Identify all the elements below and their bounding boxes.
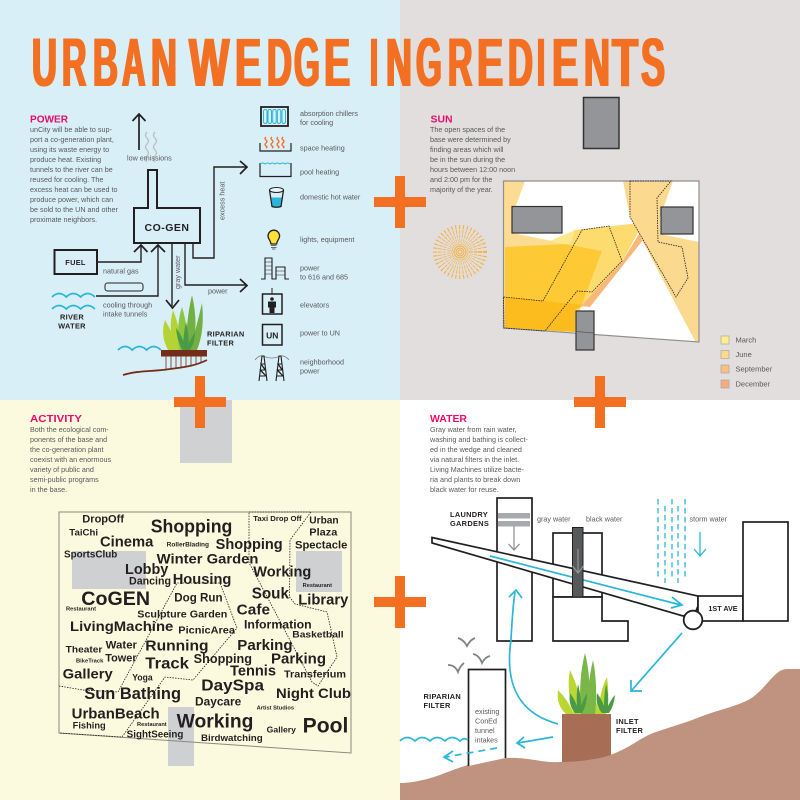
water text block [429,425,528,494]
icon: power buildings: to 616 and 685 [300,272,348,282]
plus sign: power and activity [174,376,226,428]
activity map: Shopping [194,652,252,666]
activity map: DaySpa [201,678,264,695]
activity map: SportsClub [64,549,117,560]
icon: light bulb: lights, equipment [300,235,354,244]
icon: absorption chillers: for cooling [300,118,333,127]
panel: sun [430,98,773,388]
activity map: Gallery [267,725,297,734]
title: E [477,24,504,101]
power text block: tunnels to the river can be [30,165,113,174]
water text block: via natural filters in the inlet. [430,455,519,464]
activity map: SightSeeing [127,729,183,740]
activity map: Birdwatching [201,733,263,744]
legend: September [736,364,773,374]
power text block: port a co-generation plant, [30,135,114,144]
birds [448,638,490,672]
inlet filter plant: INLET [616,717,639,726]
riparian filter plant: FILTER [207,338,234,348]
riparian tower: RIPARIAN [424,692,461,701]
power text block: be sold to the UN and other [30,205,119,214]
title: N [386,24,412,101]
activity map [59,512,351,766]
activity map: RollerBlading [167,541,209,548]
river water: WATER [58,322,86,330]
arrow: low emissions: low emissions [127,154,172,162]
title [32,24,665,101]
activity map: CoGEN [81,588,150,610]
activity map: Spectacle [295,540,347,552]
activity heading: ACTIVITY [30,414,82,425]
activity map: Working [253,565,311,581]
riparian tower: intakes [475,736,498,744]
river water: RIVER [60,312,84,322]
activity map: Tower [105,653,137,665]
activity map: Theater [66,645,103,656]
power text block: proximate neighbors. [30,215,97,224]
activity map: Gallery [63,666,113,682]
arrow: cooling through intake tunnels [96,245,165,318]
activity map: Library [298,592,349,609]
title: U [32,24,57,101]
arrow: inlet filter to tower [509,590,558,724]
plus sign: activity and water [374,576,426,628]
fuel box [54,250,97,274]
title: B [93,24,118,101]
water text block: Living Machines utilize bacte- [430,465,524,474]
icon: sun [438,230,482,274]
river waves [400,738,468,741]
sun text block [430,125,515,194]
activity map: Daycare [195,696,241,708]
activity map: Souk [252,585,289,602]
activity map: Restaurant [66,607,96,613]
gray water and black water labels [537,514,623,524]
activity map: TaiChi [69,527,98,538]
water text block: ed in the wedge and cleaned [430,445,522,454]
icon: power buildings [261,258,348,282]
plus sign: power and sun [374,176,426,228]
top building [584,98,619,148]
icon: elevator: elevators [300,300,330,310]
icon: absorption chillers [261,107,358,127]
water text block: Gray water from rain water, [430,425,517,434]
title: D [508,24,533,101]
riparian tower: FILTER [424,701,451,710]
riparian tower: ConEd [475,716,497,726]
laundry gardens tower: GARDENS [450,519,489,528]
laundry gardens tower: LAUNDRY [450,510,488,519]
arrow: junction to inlet filter [631,633,682,691]
activity map: Water [106,640,138,652]
arrow: gray water [166,243,182,308]
panel: power [30,107,361,381]
activity text block: in the base. [30,485,67,494]
activity map: Information [244,618,312,632]
legend: December [736,380,771,388]
icon: neighborhood power: neighborhood [300,358,344,366]
sun text block: majority of the year. [430,185,493,194]
power text block: using its waste energy to [30,145,109,154]
sun text block: The open spaces of the [430,125,505,134]
co-gen plant [134,170,200,243]
activity text block: semi-public programs [30,475,99,484]
black water building [553,533,628,641]
inlet filter plant [558,653,643,762]
legend: June [736,350,752,359]
hillside ground [400,669,800,800]
power text block [30,125,119,224]
storm water [658,499,728,583]
title: N [584,24,609,101]
activity map: LivingMachine [70,618,174,634]
sun text block: and 2:00 pm for the [430,175,492,184]
title: I [537,24,545,101]
icon: light bulb [268,230,354,249]
sun text block: base were determined by [430,135,511,144]
activity map: Urban [309,515,339,526]
arrow: power: power [208,286,228,296]
icon: domestic hot water: domestic hot water [300,192,361,202]
wedge section [432,538,698,616]
sun text block: be in the sun during the [430,155,505,164]
legend: March [736,336,756,344]
activity map: Working [177,711,253,732]
activity map: Fishing [73,720,106,730]
riparian filter plant: RIPARIAN [207,330,245,338]
icon: UN: power to UN [300,328,340,338]
arrow: cooling through intake tunnels: intake tunnels [103,310,148,318]
arrow: wedge water flow [490,556,682,608]
title: D [267,24,292,101]
plus sign: sun and water [574,376,626,428]
activity text block [30,425,112,494]
water text block: ria and plants to break down [430,475,520,484]
title: E [235,24,261,101]
first avenue and junction: 1ST AVE [708,604,738,613]
activity map: Dog Run [174,591,223,605]
activity map: Plaza [309,527,338,538]
activity map: Sculpture Garden [137,609,227,620]
activity map: Track [145,655,189,672]
title: I [370,24,378,101]
panel: water [400,414,800,800]
icon: neighborhood power: power [300,366,320,376]
power text block: excess heat can be used to [30,185,118,194]
black water pipe [572,528,584,597]
activity map: Cafe [237,602,270,619]
activity map: UrbanBeach [72,706,160,722]
co-gen plant: CO-GEN [144,222,190,234]
icon: neighborhood power [255,356,344,381]
activity map: Restaurant [137,722,167,728]
gray water and black water labels: gray water [537,514,571,524]
icon: space heating: space heating [300,144,345,152]
activity map: Sun Bathing [84,685,181,703]
title: A [122,24,146,101]
icon: UN: UN [266,330,278,340]
activity map: Night Club [276,685,351,701]
activity text block: coexist with an enormous [30,455,112,464]
activity map: Pool [303,715,348,738]
activity map: Parking [237,638,293,654]
water text block: washing and bathing is collect- [429,435,528,444]
power text block: produce power, which can [30,195,113,204]
first avenue and junction [684,522,788,629]
title: E [324,24,351,101]
arrow: power [185,243,247,296]
riparian tower [424,670,506,766]
activity map: Shopping [151,517,232,537]
title: W [189,24,230,101]
arrow: cooling through intake tunnels: cooling through [103,300,152,310]
river water [52,294,95,330]
activity map: Yoga [132,672,153,682]
title: S [641,24,665,101]
power heading: POWER [30,114,69,126]
icon: power buildings: power [300,264,320,272]
arrow: excess heat [193,161,247,258]
inlet filter plant: FILTER [616,726,643,735]
activity map: Parking [271,652,326,668]
riparian tower: tunnel [475,726,495,735]
icon: pool heating: pool heating [300,168,339,176]
activity text block: variety of public and [30,465,94,474]
activity map: Tennis [230,664,276,680]
arrow: low emissions [127,114,172,162]
arrowhead: dashed outflow [444,751,453,762]
storm water: storm water [690,514,728,524]
icon: UN [262,324,340,345]
activity map: PicnicArea [178,624,235,636]
icon: absorption chillers: absorption chillers [300,109,358,118]
title: T [612,24,638,101]
activity text block: ponents of the base and [30,435,107,444]
laundry gardens tower [450,498,532,641]
water heading: WATER [430,414,468,425]
sun text block: hours between 12:00 noon [430,165,515,174]
power text block: produce heat. Existing [30,155,101,164]
sun text block: finding areas which will [430,145,504,154]
activity map: Lobby [125,562,168,578]
activity map: Basketball [292,629,344,640]
riparian filter plant [118,295,245,375]
sun heading: SUN [430,114,452,126]
power text block: unCity will be able to sup- [30,125,113,134]
activity map: Transferium [284,668,346,680]
title: G [294,24,320,101]
power text block: reused for cooling. The [30,175,103,184]
icon: domestic hot water [270,188,361,207]
activity map: Restaurant [303,583,332,589]
title: E [552,24,578,101]
fuel box: FUEL [65,258,86,267]
sun shadow map [504,181,699,350]
panel: activity [30,414,351,766]
arrow: gray water: gray water [173,255,182,289]
title: N [151,24,176,101]
activity map: BikeTrack [76,659,103,665]
title: R [62,24,87,101]
activity text block: the co-generation plant [30,445,104,454]
riparian tower: existing [475,707,499,716]
icon: pool heating [260,163,339,176]
activity map: Running [145,637,209,654]
title: R [448,24,472,101]
activity map: Housing [173,572,231,588]
arrow: excess heat: excess heat [218,182,226,220]
icon: elevator [262,288,330,314]
activity map: DropOff [82,514,124,526]
activity map: Dancing [129,575,171,587]
title: G [416,24,442,101]
activity map: Taxi Drop Off [253,516,302,523]
activity map: Shopping [216,537,283,553]
arrow: natural gas: natural gas [103,266,139,276]
icon: space heating [260,137,345,152]
arrow: inlet filter to riparian [517,737,553,748]
gray water and black water labels: black water [586,514,623,524]
activity map: Cinema [100,535,154,551]
water text block: black water for reuse. [430,485,499,494]
activity text block: Both the ecological com- [30,425,109,434]
arrow: natural gas [97,245,148,276]
activity map: Artist Studios [257,705,294,711]
legend [721,336,773,388]
activity map: Winter Garden [157,550,258,566]
arrow: dashed outflow [446,748,497,757]
